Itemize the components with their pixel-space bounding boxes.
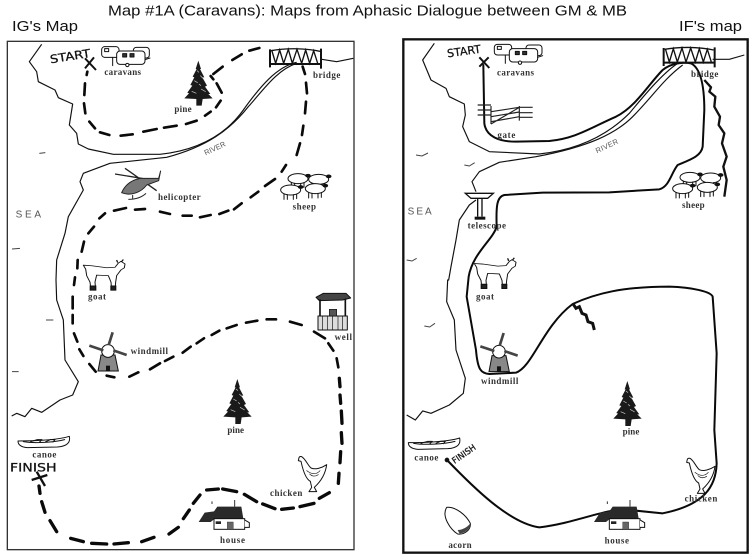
- scribble: upper path: [573, 303, 594, 330]
- icon: well: [316, 293, 352, 342]
- icon: goat: goat: [88, 291, 106, 301]
- icon: pine lower: [223, 379, 252, 435]
- icon: caravans: [494, 44, 543, 78]
- icon: sheep: [281, 174, 331, 211]
- scribble: right detour: [704, 80, 727, 197]
- icon: canoe: canoe: [32, 449, 56, 459]
- icon: pine: pine: [623, 426, 639, 436]
- icon: chicken: [270, 457, 327, 498]
- finish label: FINISH: [451, 443, 478, 466]
- icon: acorn: [445, 507, 472, 550]
- title: Map #1A (Caravans): Maps from Aphasic Dialogue between GM & MB: [108, 2, 627, 20]
- icon: caravans: caravans: [104, 67, 141, 77]
- route: solid line upper: [447, 63, 717, 527]
- icon: pine upper: [174, 61, 213, 114]
- heading: IG's map: IG's Map: [12, 18, 78, 35]
- heading: IF's map: IF's map: [679, 18, 742, 35]
- panel: IF's map: [403, 39, 748, 553]
- start marker: START: [446, 43, 482, 60]
- icon: acorn: acorn: [448, 540, 472, 550]
- icon: house: [594, 500, 645, 546]
- icon: windmill: windmill: [481, 376, 519, 386]
- icon: gate: [478, 105, 533, 140]
- start marker: [49, 46, 96, 70]
- start marker: [446, 43, 489, 68]
- finish marker: FINISH: [10, 460, 57, 474]
- icon: goat: [474, 258, 516, 302]
- river label: RIVER: [203, 139, 227, 157]
- icon: bridge: [270, 49, 340, 80]
- icon: chicken: chicken: [270, 488, 302, 498]
- icon: windmill: [89, 332, 168, 371]
- icon: house: house: [605, 536, 629, 546]
- icon: goat: [83, 259, 125, 301]
- route end dot: [445, 458, 449, 462]
- icon: pine upper: pine: [174, 104, 192, 114]
- icon: gate: gate: [497, 130, 515, 140]
- icon: canoe: [18, 436, 70, 459]
- icon: sheep: sheep: [293, 201, 316, 211]
- sea label: SEA: [408, 206, 432, 217]
- coastline and river: [12, 44, 353, 417]
- river label: RIVER: [594, 137, 620, 155]
- icon: pine: [613, 381, 642, 436]
- icon: windmill: [480, 333, 519, 386]
- icon: helicopter: helicopter: [158, 192, 201, 202]
- sea label: SEA: [16, 210, 41, 221]
- icon: bridge: bridge: [691, 69, 718, 79]
- icon: goat: goat: [476, 292, 494, 302]
- icon: sheep: [673, 172, 723, 210]
- icon: house: house: [220, 535, 245, 545]
- finish marker: [10, 460, 57, 486]
- start marker: START: [49, 46, 91, 66]
- icon: chicken: [685, 458, 717, 504]
- icon: caravans: caravans: [497, 68, 534, 78]
- panel: IG's map: [7, 41, 354, 550]
- icon: telescope: telescope: [468, 220, 506, 230]
- icon: house: [199, 500, 249, 545]
- route: dashed line upper: [74, 48, 307, 285]
- icon: well: well: [335, 332, 352, 342]
- icon: windmill: windmill: [131, 346, 168, 356]
- icon: bridge: bridge: [313, 70, 340, 80]
- icon: bridge: [664, 47, 718, 79]
- icon: chicken: chicken: [685, 494, 717, 504]
- icon: caravans: [102, 47, 150, 77]
- icon: helicopter: [115, 168, 201, 202]
- icon: telescope: [465, 193, 506, 230]
- coastline and river: [407, 43, 744, 420]
- icon: sheep: sheep: [682, 200, 705, 210]
- icon: pine lower: pine: [227, 425, 244, 435]
- route: dashed line lower: [39, 297, 342, 544]
- icon: canoe: canoe: [414, 453, 438, 463]
- icon: canoe: [408, 438, 460, 463]
